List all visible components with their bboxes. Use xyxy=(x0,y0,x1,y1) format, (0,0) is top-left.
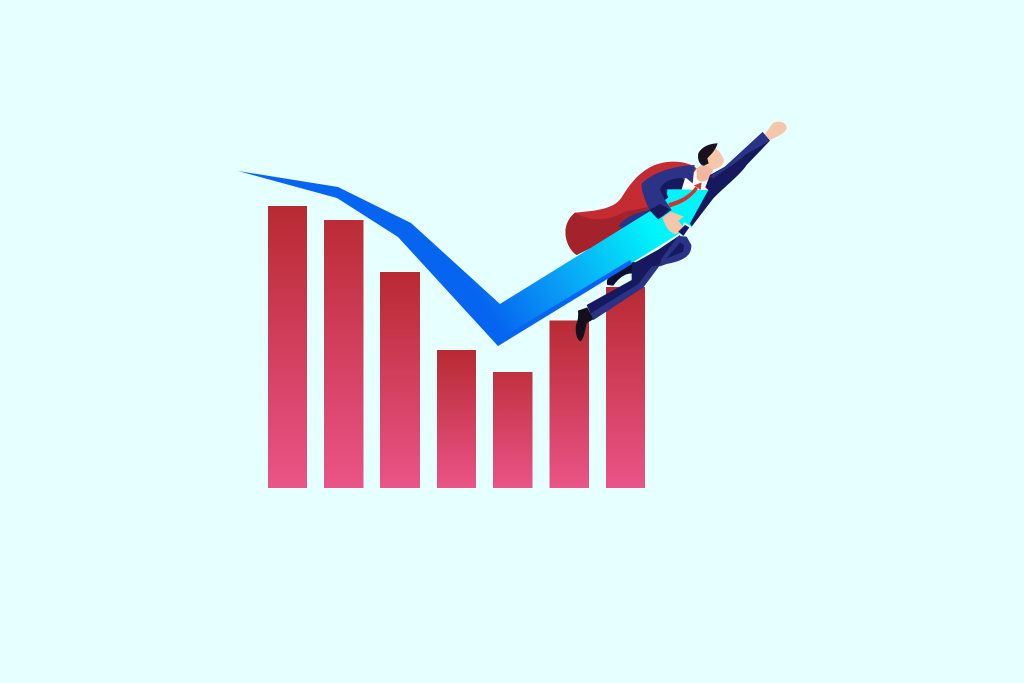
neck xyxy=(697,162,713,181)
fist xyxy=(765,122,787,140)
bar chart xyxy=(268,206,645,488)
front leg xyxy=(587,235,683,320)
necktie curve xyxy=(694,182,702,190)
shoe xyxy=(576,307,593,341)
bent arm sleeve xyxy=(641,165,695,219)
blue trend line arrow xyxy=(238,171,708,346)
trouser highlight xyxy=(591,265,660,320)
businessman torso behind arrow xyxy=(618,172,712,230)
businessman xyxy=(576,122,787,341)
face xyxy=(705,146,724,169)
cuff xyxy=(678,225,689,236)
back leg xyxy=(607,262,645,286)
hair xyxy=(698,143,718,166)
hand xyxy=(663,212,684,234)
bent knee xyxy=(659,236,691,267)
cape xyxy=(565,162,697,255)
raised arm xyxy=(690,132,770,227)
